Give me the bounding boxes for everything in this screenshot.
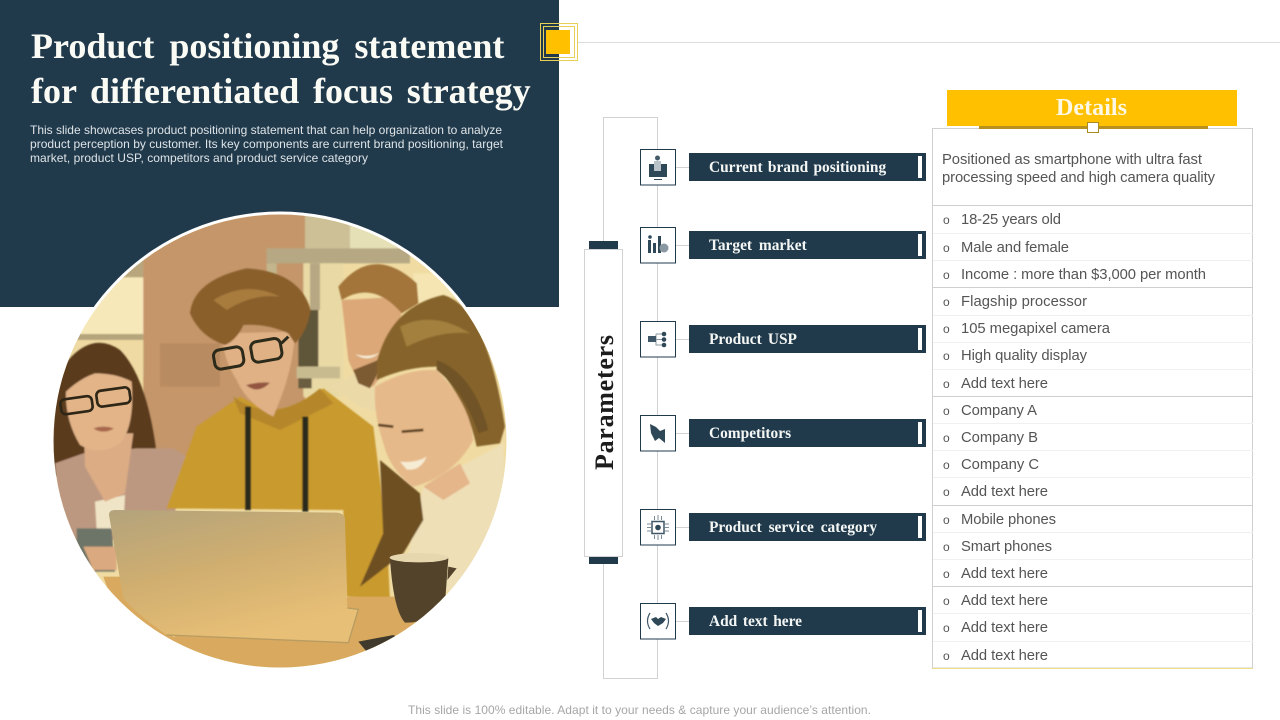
description text: market, product USP, competitors and product service category	[30, 151, 368, 165]
details: competitors list: Add text here	[961, 484, 1048, 500]
icon: handshake	[640, 604, 676, 639]
details: product USP list: o	[943, 295, 950, 309]
details header: Details	[1056, 95, 1127, 121]
parameters panel	[584, 241, 622, 564]
row: add text here	[640, 604, 926, 639]
mug	[390, 553, 457, 623]
details: add text list: Add text here	[961, 620, 1048, 636]
details: service category list: Smart phones	[961, 539, 1052, 555]
details: competitors list: Company B	[961, 430, 1038, 446]
left woman glasses	[60, 387, 131, 415]
details header	[947, 90, 1237, 132]
connector lines	[604, 118, 689, 678]
details: add text list: Add text here	[961, 648, 1048, 664]
details: add text list: Add text here	[961, 593, 1048, 609]
details: add text list: o	[943, 649, 950, 663]
details: product USP list: o	[943, 349, 950, 363]
details: target market list: o	[943, 213, 950, 227]
table	[103, 576, 417, 668]
center person yellow hoodie	[167, 268, 390, 600]
details: service category list	[943, 512, 1056, 582]
details: target market list: 18-25 years old	[961, 212, 1061, 228]
details: service category list: Add text here	[961, 566, 1048, 582]
left woman	[53, 343, 187, 572]
details: product USP list: o	[943, 322, 950, 336]
phone	[358, 635, 396, 650]
details: target market list: o	[943, 241, 950, 255]
brick wall and window background	[60, 210, 453, 457]
icon: competitors arrows	[640, 416, 676, 451]
details table	[932, 128, 1253, 668]
details: competitors list	[943, 403, 1048, 500]
decorative square icon	[540, 24, 578, 60]
details: add text list	[943, 593, 1048, 664]
icon: chip	[640, 510, 676, 545]
row: product service category	[640, 510, 926, 545]
details: target market list: o	[943, 268, 950, 282]
row: product USP	[640, 322, 926, 357]
row: target market	[640, 228, 926, 263]
details: add text list: o	[943, 621, 950, 635]
man in the back	[338, 263, 420, 389]
details: competitors list: o	[943, 485, 950, 499]
details: brand positioning text: Positioned as smartphone with ultra fast	[942, 152, 1202, 168]
row: product service category: Product service category	[709, 519, 877, 536]
details: target market list: Income : more than $3,000 per month	[961, 267, 1206, 283]
title: Product positioning statement	[31, 26, 504, 66]
description text	[30, 123, 504, 165]
right woman with dreadlocks	[360, 295, 507, 597]
row: product USP: Product USP	[709, 331, 797, 348]
details: product USP list	[943, 294, 1111, 392]
details: competitors list: Company C	[961, 457, 1039, 473]
details: competitors list: o	[943, 404, 950, 418]
circular team photo illustration	[54, 212, 506, 668]
parameters panel: Parameters	[590, 335, 619, 470]
details: product USP list: High quality display	[961, 348, 1088, 364]
description text: This slide showcases product positioning statement that can help organization to analyze	[30, 123, 502, 137]
details: brand positioning text: processing speed and high camera quality	[942, 170, 1216, 186]
details: service category list: o	[943, 567, 950, 581]
header panel	[0, 0, 559, 307]
details: add text list: o	[943, 594, 950, 608]
row: current brand positioning	[640, 150, 926, 185]
row: competitors: Competitors	[709, 425, 791, 442]
footer note: This slide is 100% editable. Adapt it to your needs & capture your audience’s attention.	[408, 703, 871, 717]
icon: chart and target	[640, 228, 676, 263]
details: product USP list: 105 megapixel camera	[961, 321, 1111, 337]
center person glasses	[213, 337, 288, 370]
details: target market list: Male and female	[961, 240, 1069, 256]
row: competitors	[640, 416, 926, 451]
icon: USP flow diagram	[640, 322, 676, 357]
details: competitors list: o	[943, 458, 950, 472]
row: current brand positioning: Current brand positioning	[709, 159, 886, 176]
description text: product perception by customer. Its key components are current brand positioning, target	[30, 137, 504, 151]
details: service category list: Mobile phones	[961, 512, 1056, 528]
details: competitors list: o	[943, 431, 950, 445]
details: target market list	[943, 212, 1206, 283]
details: product USP list: o	[943, 377, 950, 391]
details: product USP list: Add text here	[961, 376, 1048, 392]
details: brand positioning text	[942, 152, 1216, 186]
details: competitors list: Company A	[961, 403, 1037, 419]
title: for differentiated focus strategy	[31, 71, 531, 111]
details: service category list: o	[943, 540, 950, 554]
row: target market: Target market	[709, 237, 808, 254]
details: service category list: o	[943, 513, 950, 527]
header rule	[578, 42, 1280, 44]
title	[31, 26, 531, 111]
details: product USP list: Flagship processor	[961, 294, 1087, 310]
laptop	[109, 510, 358, 643]
icon: brand monitor	[640, 150, 676, 185]
row: add text here: Add text here	[709, 613, 802, 630]
